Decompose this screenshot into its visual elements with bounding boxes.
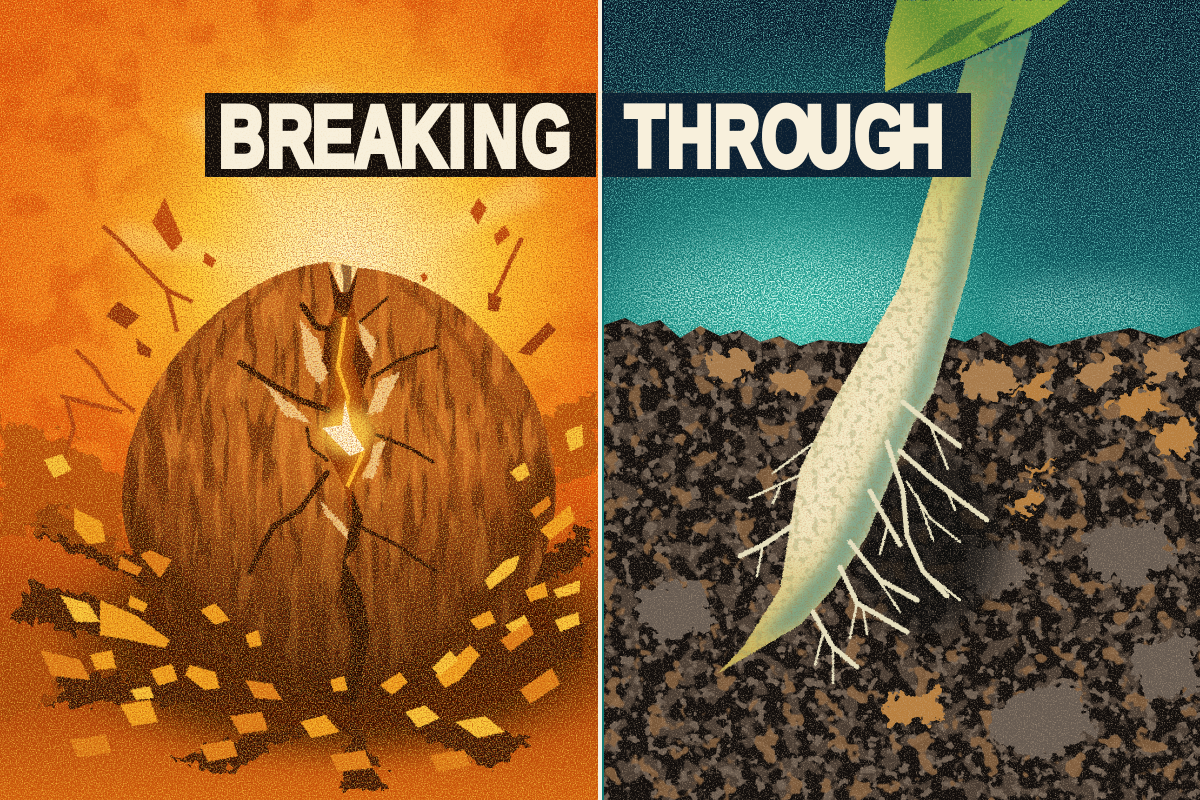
orange grain texture <box>0 0 598 800</box>
main crack <box>322 264 377 712</box>
shell shards scattered over rubble <box>40 424 584 772</box>
tan clods near surface <box>635 346 1200 760</box>
soil with clods <box>602 310 1200 800</box>
secondary cracks <box>240 298 437 572</box>
panel: left, cracking seed on orange ground <box>0 0 598 800</box>
teal night sky <box>602 0 1200 800</box>
title: BREAKING: BREAKING <box>219 90 571 185</box>
cream roots <box>740 402 987 683</box>
glowing lava crack <box>319 317 375 487</box>
bright notch at top of the shell <box>325 255 360 292</box>
title: THROUGH: THROUGH <box>625 90 944 185</box>
panel: right, sprout rooting through soil <box>602 0 1200 800</box>
seed shell <box>110 255 570 715</box>
sprout stem <box>716 30 1032 674</box>
flying shell chips and ground cracks <box>60 198 556 470</box>
green leaf at top <box>885 0 1070 95</box>
orange background with glow <box>0 0 598 800</box>
dark rubble field around seed base <box>0 390 598 793</box>
